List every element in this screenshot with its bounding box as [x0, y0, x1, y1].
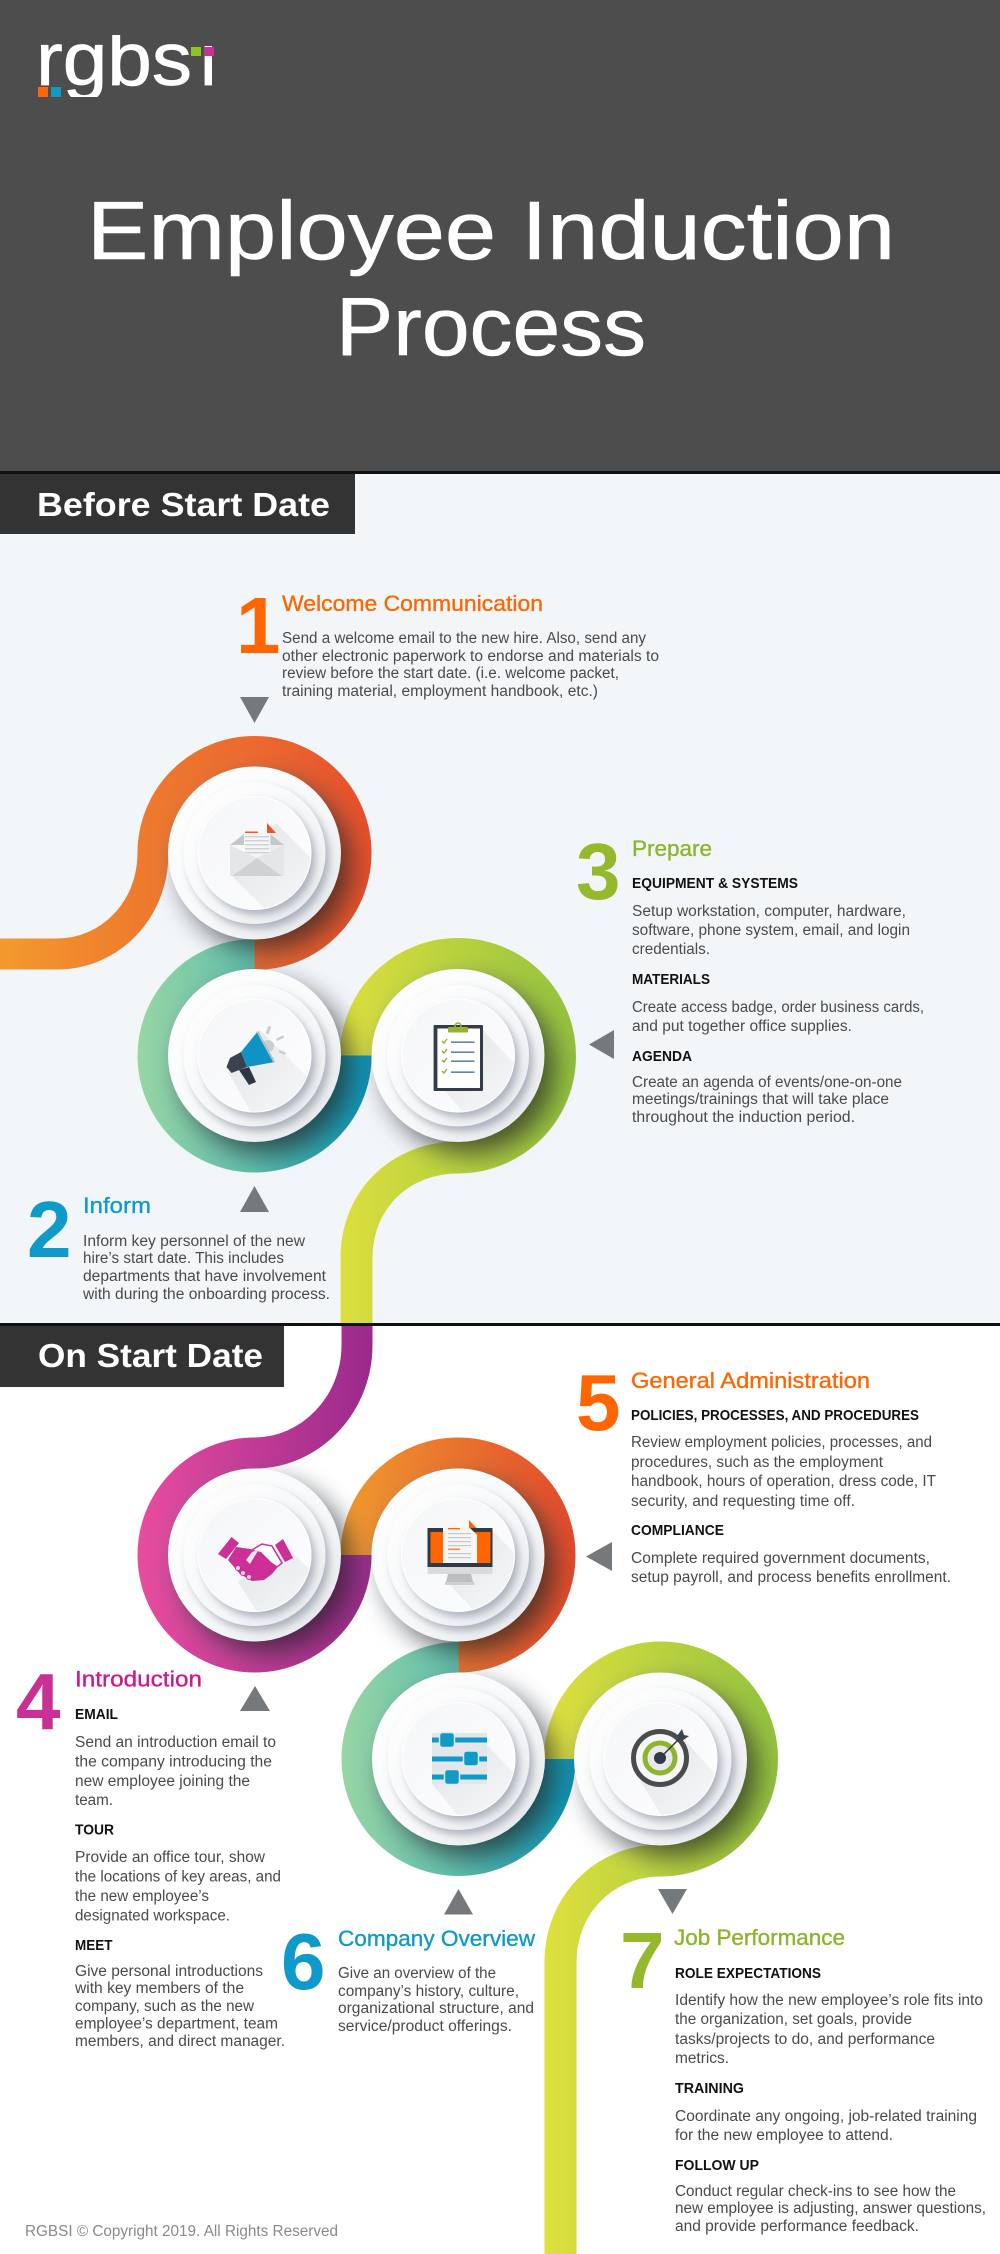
ring 1: orange	[0, 752, 356, 954]
subsection: follow up: and provide performance feedback.	[675, 2218, 919, 2235]
panel: before start date background	[0, 474, 1000, 1323]
subsection: tour: TOUR	[75, 1822, 114, 1838]
panel: step 3 prepare	[576, 827, 924, 1126]
panel: step 4 introduction	[16, 1657, 285, 2050]
ring 5: orange	[356, 1453, 560, 1657]
number 2: 2	[27, 1185, 72, 1274]
text block: review before the start date. (i.e. welcome packet,	[282, 665, 619, 682]
subsection: tour: Provide an office tour, show	[75, 1849, 266, 1866]
ring 4: magenta	[153, 1324, 357, 1657]
disc 5 with monitor and document icon	[372, 1468, 544, 1642]
subsection: follow up: Conduct regular check-ins to see how the	[675, 2183, 956, 2200]
logo: rgbs	[36, 17, 192, 101]
subsection: email: EMAIL	[75, 1706, 118, 1723]
subsection: meet: Give personal introductions	[75, 1963, 263, 1980]
text block: service/product offerings.	[338, 2018, 512, 2035]
subsection: materials: Create access badge, order business cards,	[632, 999, 924, 1016]
subsection: training	[675, 2080, 977, 2144]
subsection: materials: MATERIALS	[632, 971, 710, 988]
subsection: policies: security, and requesting time off.	[631, 1493, 855, 1510]
subsection: email: the company introducing the	[75, 1754, 272, 1770]
icon: sliders	[432, 1732, 487, 1784]
title	[87, 184, 895, 373]
number 1: 1	[236, 581, 280, 670]
logo: i	[200, 17, 217, 101]
arrow: step 2 up	[240, 1186, 269, 1212]
number 6: 6	[281, 1917, 326, 2006]
icon: clipboard	[434, 1023, 483, 1091]
text block: departments that have involvement	[83, 1268, 327, 1285]
subsection: tour: the new employee’s	[75, 1888, 209, 1905]
arrow: step 3 left	[589, 1030, 614, 1059]
section tab: on start date: On Start Date	[38, 1337, 263, 1374]
number 7: 7	[620, 1916, 664, 2005]
arrow: step 6 up	[444, 1889, 473, 1914]
text block	[282, 630, 659, 700]
disc 4 with handshake icon	[168, 1468, 341, 1642]
subsection: agenda: Create an agenda of events/one-on-one	[632, 1074, 902, 1091]
section tab: on start date	[0, 1326, 284, 1387]
footer: copyright: RGBSI © Copyright 2019. All Rights Reserved	[25, 2223, 338, 2240]
subsection: equipment and systems: credentials.	[632, 941, 710, 958]
subsection: materials	[632, 971, 924, 1035]
text block: with during the onboarding process.	[82, 1286, 330, 1303]
icon: handshake	[218, 1537, 293, 1581]
subsection: policies: handbook, hours of operation, dress code, IT	[631, 1473, 937, 1490]
subsection: equipment and systems: Setup workstation, computer, hardware,	[632, 903, 906, 920]
subsection: tour: designated workspace.	[75, 1908, 230, 1924]
subsection: meet: employee’s department, team	[75, 2016, 278, 2032]
text block: Inform key personnel of the new	[83, 1233, 306, 1250]
disc 1 with envelope icon	[168, 766, 341, 940]
subsection: follow up: new employee is adjusting, answer questions,	[675, 2200, 986, 2217]
subsection: compliance	[631, 1522, 951, 1586]
subsection: email: new employee joining the	[75, 1773, 250, 1790]
disc 2 with megaphone icon	[168, 969, 341, 1142]
heading: Job Performance	[674, 1925, 845, 1950]
text block: other electronic paperwork to endorse and materials to	[282, 648, 659, 665]
subsection: agenda	[632, 1048, 902, 1126]
section tab: before start date	[0, 474, 355, 534]
subsection: compliance: COMPLIANCE	[631, 1522, 724, 1539]
text block	[338, 1965, 534, 2035]
ring 6: teal	[357, 1658, 560, 1860]
panel: step 5 general administration	[576, 1358, 951, 1586]
section tab: before start date: Before Start Date	[37, 486, 330, 523]
subsection: tour: the locations of key areas, and	[75, 1868, 281, 1886]
subsection: role expectations	[675, 1965, 983, 2067]
subsection: role expectations: tasks/projects to do, and performance	[675, 2031, 935, 2048]
ring 7: lime	[560, 1658, 762, 2254]
arrow: step 7 down	[658, 1889, 687, 1914]
subsection: materials: and put together office supplies.	[632, 1018, 852, 1035]
title: Process	[336, 280, 646, 373]
subsection: compliance: Complete required government documents,	[631, 1550, 930, 1567]
arrow: step 1 down	[240, 697, 269, 723]
subsection: compliance: setup payroll, and process benefits enrollment.	[631, 1569, 951, 1586]
heading: Inform	[83, 1193, 151, 1218]
panel: step 2 inform	[27, 1185, 330, 1303]
subsection: role expectations: the organization, set goals, provide	[675, 2011, 912, 2028]
heading: Welcome Communication	[282, 591, 543, 616]
title: Employee Induction	[87, 184, 895, 277]
disc shadows	[172, 774, 757, 1856]
subsection: role expectations: Identify how the new employee’s role fits into	[675, 1992, 983, 2009]
text block: company’s history, culture,	[338, 1983, 519, 2000]
heading: General Administration	[631, 1368, 870, 1393]
subsection: agenda: meetings/trainings that will take place	[632, 1091, 889, 1108]
subsection: agenda: AGENDA	[632, 1048, 692, 1065]
subsection: role expectations: metrics.	[675, 2050, 729, 2067]
ribbon path: connected coloured rings	[0, 752, 762, 2254]
arrow: step 5 left	[586, 1542, 612, 1571]
text block	[82, 1233, 330, 1303]
logo	[38, 35, 214, 97]
subsection: meet	[74, 1937, 285, 2050]
subsection: equipment and systems	[632, 875, 910, 958]
panel: step 7 job performance	[620, 1916, 986, 2235]
subsection: policies	[631, 1407, 937, 1510]
disc 6 with sliders icon	[372, 1672, 545, 1846]
subsection: role expectations: ROLE EXPECTATIONS	[675, 1965, 821, 1982]
disc 3 with clipboard icon	[372, 969, 544, 1142]
subsection: meet: MEET	[75, 1937, 112, 1954]
subsection: email: team.	[75, 1792, 113, 1809]
icon: megaphone	[226, 1026, 286, 1085]
icon: target and dart	[634, 1729, 689, 1784]
subsection: email: Send an introduction email to	[75, 1734, 276, 1751]
subsection: policies: POLICIES, PROCESSES, AND PROCEDURES	[631, 1407, 919, 1424]
panel: step 6 company overview	[281, 1917, 535, 2035]
subsection: equipment and systems: software, phone system, email, and login	[632, 922, 910, 939]
number 4: 4	[16, 1657, 61, 1746]
subsection: follow up: FOLLOW UP	[675, 2157, 759, 2174]
number 3: 3	[576, 827, 620, 916]
subsection: follow up	[675, 2157, 986, 2235]
ring 2: teal	[153, 954, 356, 1157]
subsection: tour	[75, 1822, 281, 1924]
subsection: policies: Review employment policies, processes, and	[631, 1434, 932, 1451]
text block: organizational structure, and	[338, 2000, 534, 2017]
subsection: training: TRAINING	[675, 2080, 744, 2097]
text block: Send a welcome email to the new hire. Also, send any	[282, 630, 646, 647]
panel: header	[0, 0, 1000, 471]
subsection: email	[75, 1706, 276, 1809]
subsection: meet: company, such as the new	[75, 1998, 255, 2015]
subsection: equipment and systems: EQUIPMENT & SYSTEMS	[632, 875, 798, 892]
arrow: step 4 up	[240, 1686, 270, 1711]
subsection: agenda: throughout the induction period.	[632, 1109, 855, 1126]
subsection: training: for the new employee to attend.	[675, 2127, 893, 2144]
subsection: meet: members, and direct manager.	[75, 2033, 285, 2050]
icon: monitor with document	[428, 1520, 492, 1585]
heading: Introduction	[75, 1666, 202, 1692]
subsection: training: Coordinate any ongoing, job-related training	[675, 2108, 977, 2125]
subsection: policies: procedures, such as the employment	[631, 1454, 884, 1471]
text block: Give an overview of the	[338, 1965, 496, 1982]
ring 3: lime	[356, 954, 560, 1326]
disc 7 with target icon	[574, 1672, 747, 1846]
divider lines	[0, 471, 1000, 474]
heading: Prepare	[632, 836, 712, 861]
heading: Company Overview	[338, 1926, 535, 1951]
subsection: meet: with key members of the	[74, 1980, 244, 1997]
panel: step 1 welcome communication	[236, 581, 659, 700]
text block: hire’s start date. This includes	[83, 1250, 284, 1267]
number 5: 5	[576, 1358, 620, 1447]
icon: envelope	[230, 823, 284, 876]
text block: training material, employment handbook, etc.)	[282, 683, 598, 700]
